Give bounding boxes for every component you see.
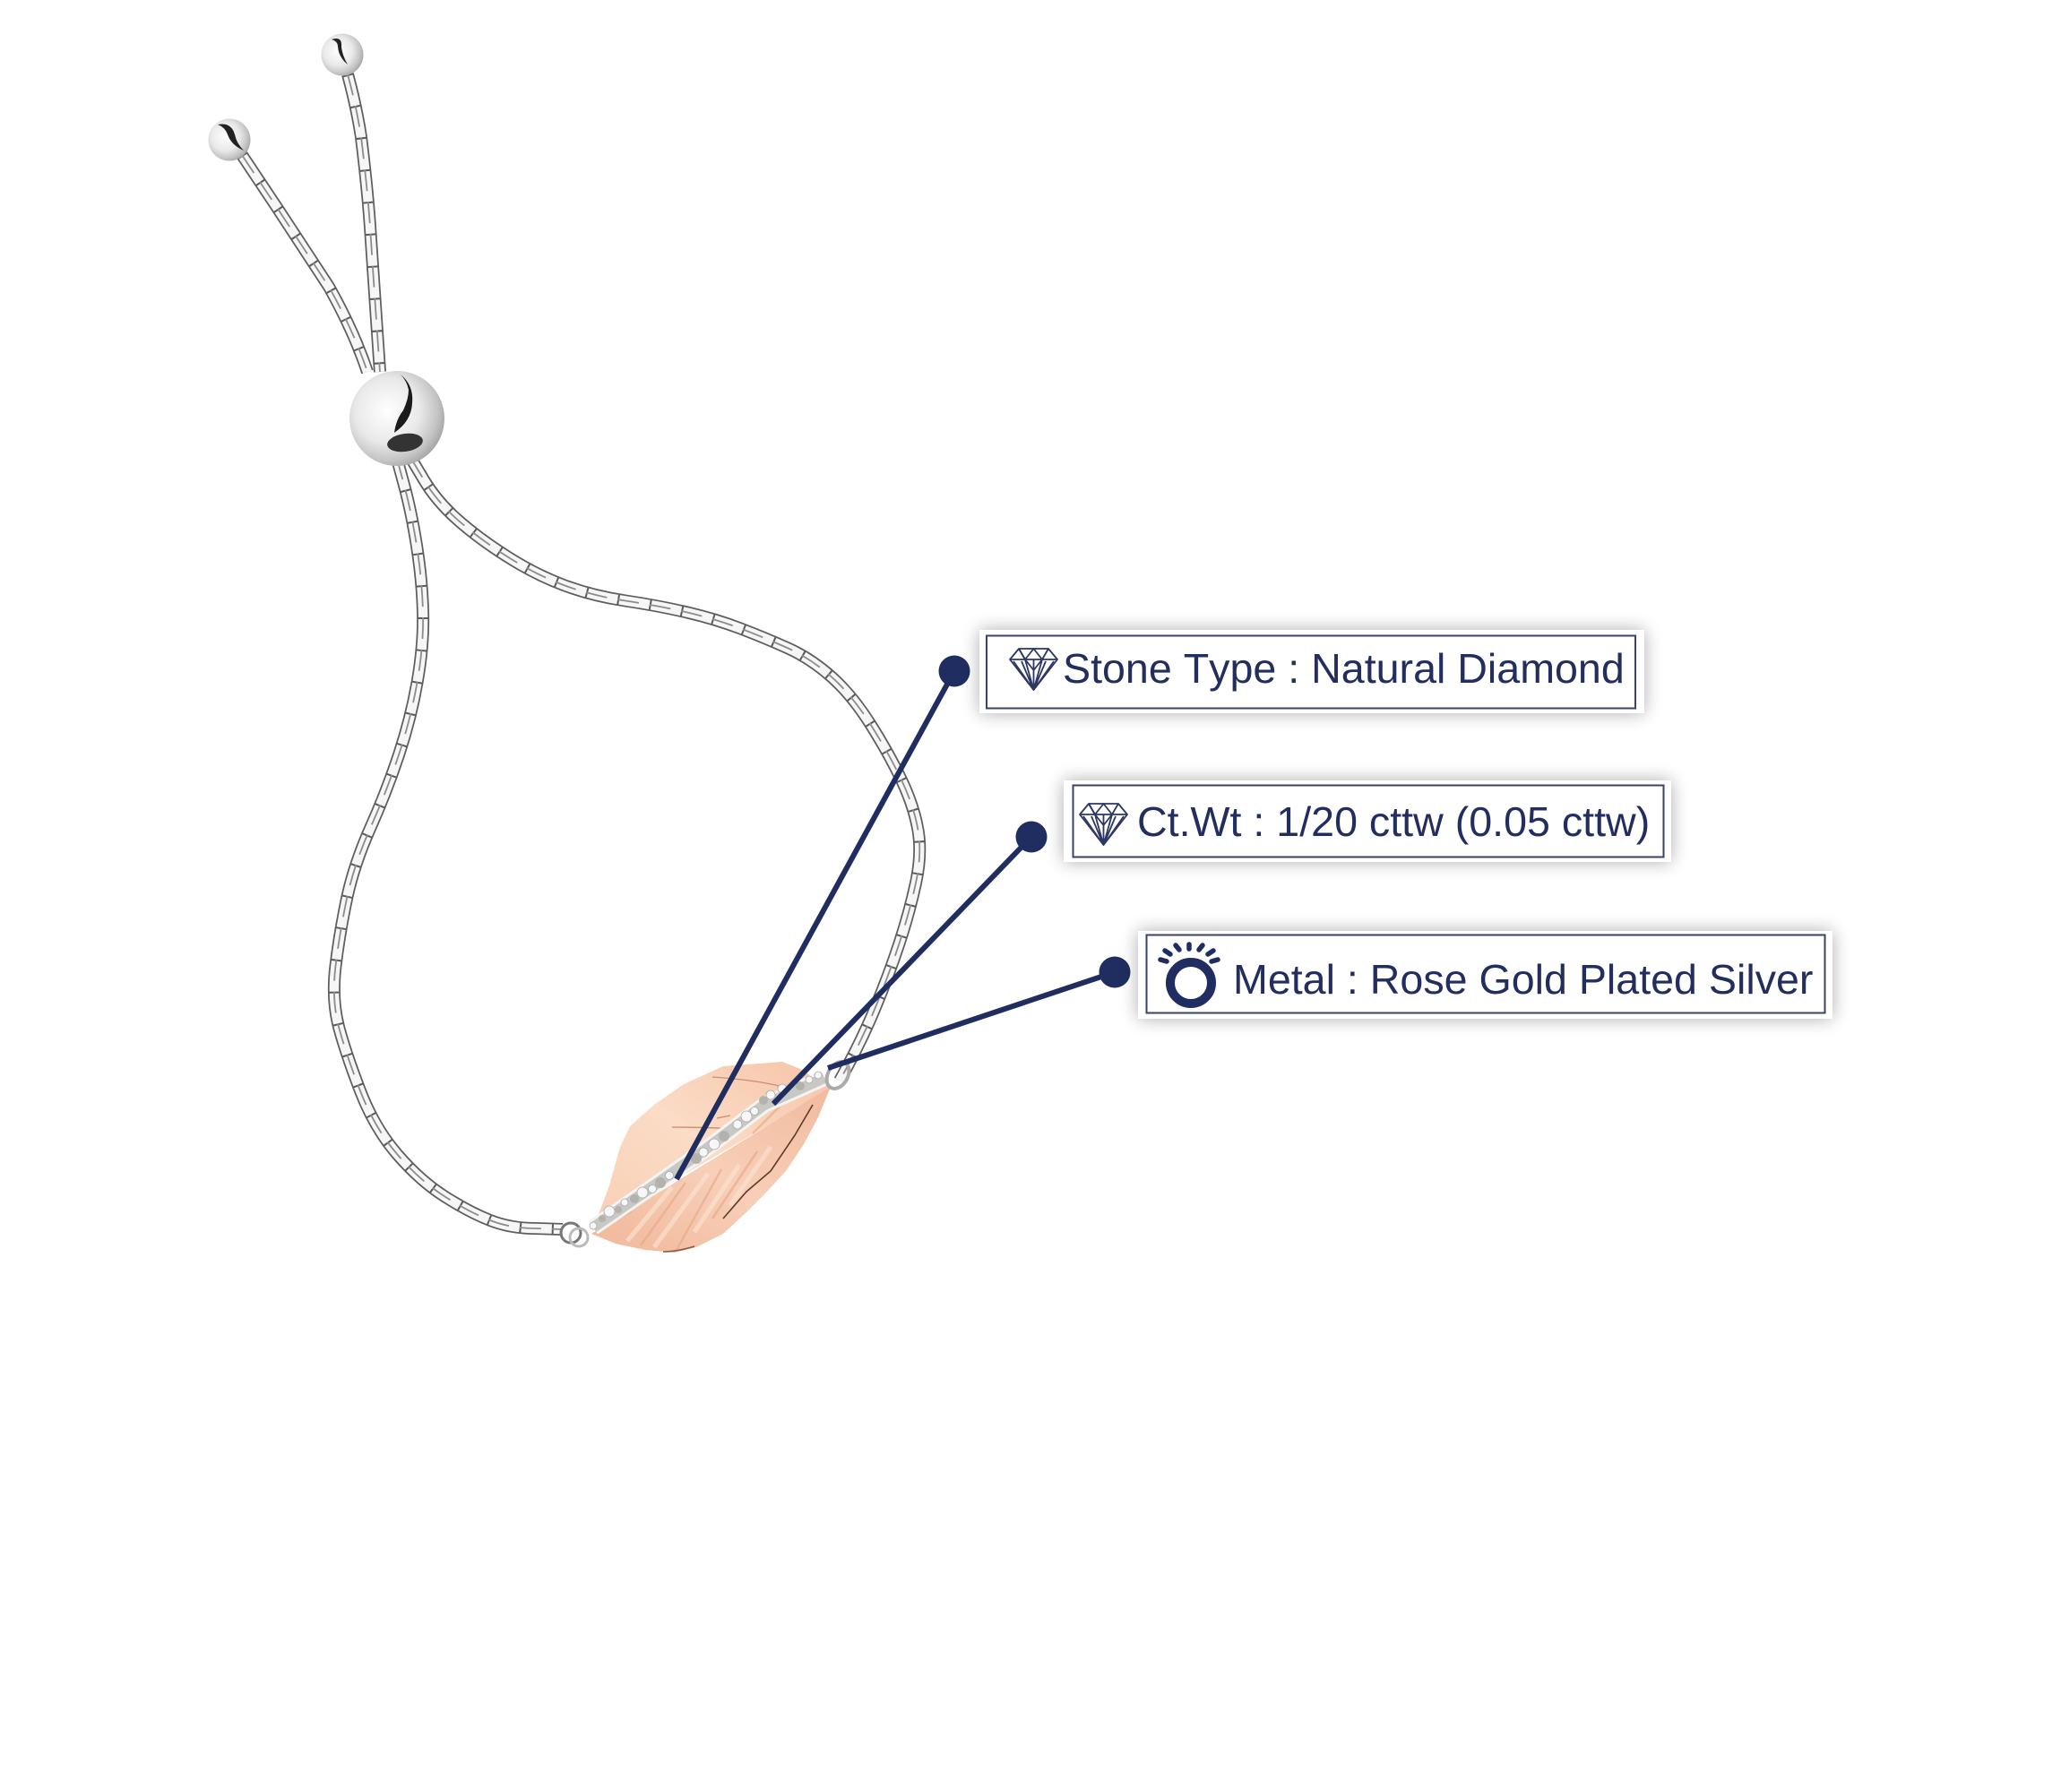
callout text: metal: Metal : Rose Gold Plated Silver xyxy=(1233,956,1813,1003)
leader line: stone type xyxy=(677,656,970,1179)
diamond band xyxy=(590,1072,824,1229)
icon: ring xyxy=(1160,944,1218,1004)
callout: carat weight xyxy=(1064,780,1671,862)
clasp left xyxy=(561,1223,588,1246)
end bead right xyxy=(321,34,364,75)
leader line: metal xyxy=(828,957,1131,1068)
leaf pendant xyxy=(561,1058,854,1253)
leader line: carat weight xyxy=(773,821,1047,1104)
bracelet xyxy=(208,34,919,1253)
icon: diamond xyxy=(1010,649,1057,690)
callout text: stone type: Stone Type : Natural Diamond xyxy=(1063,645,1625,692)
callout: stone type xyxy=(979,630,1644,713)
chain xyxy=(242,74,919,1229)
clasp right xyxy=(822,1058,854,1092)
callout text: carat weight: Ct.Wt : 1/20 cttw (0.05 cttw) xyxy=(1137,798,1650,845)
slider bead xyxy=(349,371,444,466)
icon: diamond xyxy=(1080,804,1127,845)
end bead left xyxy=(208,118,251,161)
callout: metal xyxy=(1138,931,1832,1019)
